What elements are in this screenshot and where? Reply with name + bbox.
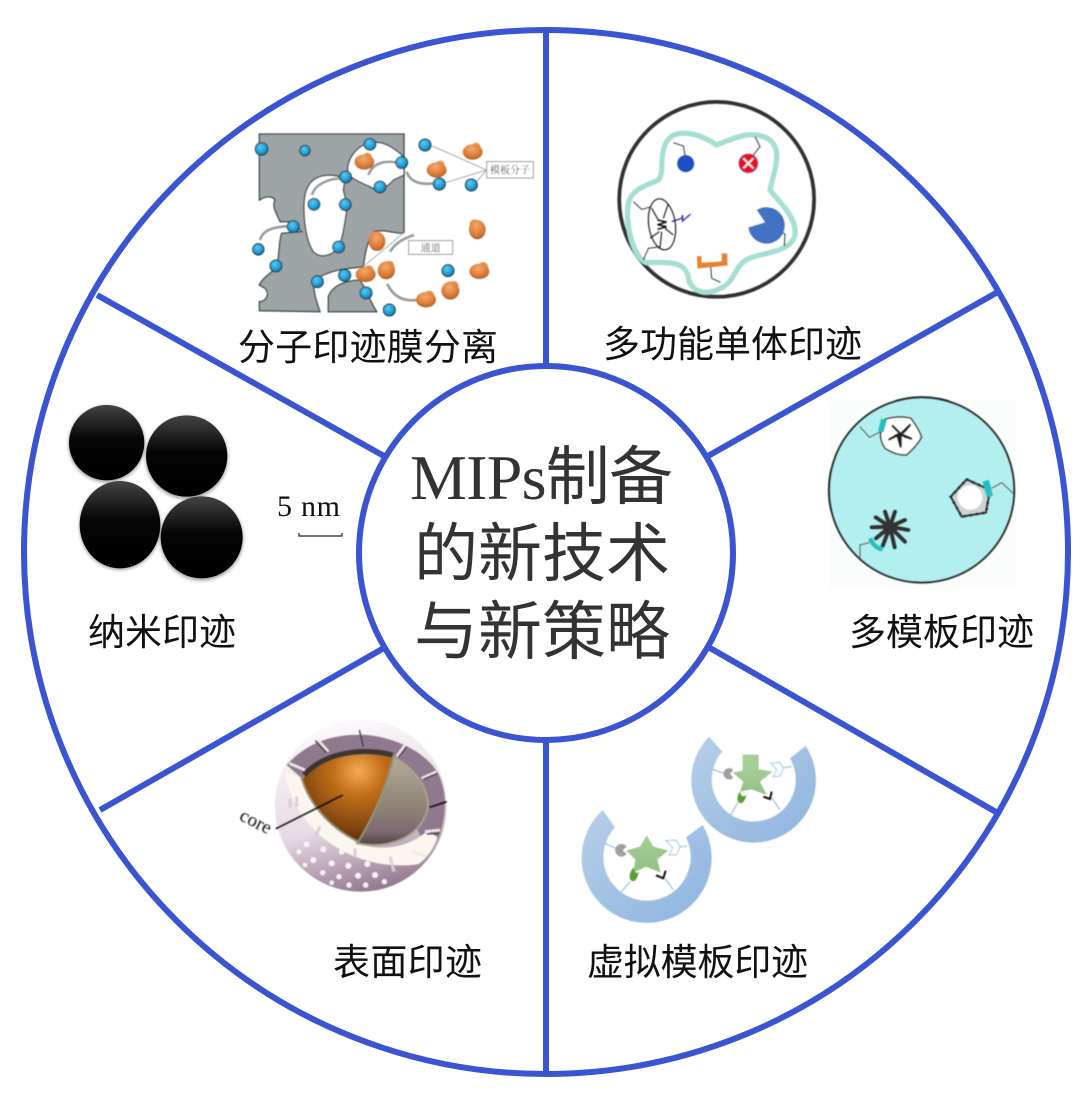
panel: membrane separation [238, 134, 533, 368]
core-shell sphere illustration [236, 720, 447, 892]
central hub [359, 366, 733, 740]
panel: multifunctional monomer [603, 102, 862, 365]
label: multi-template: 多模板印迹 [849, 612, 1034, 653]
label: dummy template: 虚拟模板印迹 [587, 942, 808, 983]
lower cavity ring [582, 810, 712, 923]
callout: template molecule: 模板分子 [490, 163, 530, 176]
label: surface imprinting: 表面印迹 [333, 942, 482, 983]
nanoparticles illustration [68, 405, 243, 581]
cut wedge [357, 757, 428, 845]
panel: multi-template [829, 397, 1034, 653]
title line 3: 与新策略 [414, 597, 670, 668]
label: multifunctional monomer: 多功能单体印迹 [603, 324, 862, 365]
label: nano imprinting: 纳米印迹 [88, 612, 236, 653]
hexagon ring cavity [951, 479, 1013, 517]
callout: channel: 通道 [421, 241, 441, 254]
upper cavity ring [691, 737, 816, 843]
scale bar [299, 533, 342, 536]
title line 2: 的新技术 [414, 519, 670, 590]
core pointer line [276, 795, 343, 829]
monomer imprinting illustration [619, 102, 814, 297]
oval crown monomer [645, 197, 691, 252]
blue template spheres [253, 138, 477, 316]
orange target molecules [354, 143, 489, 307]
panel: nano imprinting [68, 405, 342, 653]
blue round monomer [677, 155, 694, 172]
membrane imprinting illustration [253, 134, 533, 316]
title: MIPs制备 [410, 442, 673, 513]
orange bracket monomer [697, 253, 728, 269]
panel: dummy template [582, 737, 816, 983]
label: membrane separation: 分子印迹膜分离 [238, 327, 498, 368]
pentagon flower cavity [860, 417, 922, 455]
red cross monomer [739, 154, 758, 173]
star burst cavity [860, 512, 908, 558]
orange core [302, 754, 393, 842]
scale label: 5 nm [277, 490, 340, 523]
core label: core [236, 805, 275, 839]
blue pacman monomer [748, 207, 785, 244]
dummy template illustration [582, 737, 816, 923]
pores [296, 841, 387, 888]
multi-template illustration [829, 397, 1017, 590]
panel: surface imprinting [236, 720, 482, 983]
